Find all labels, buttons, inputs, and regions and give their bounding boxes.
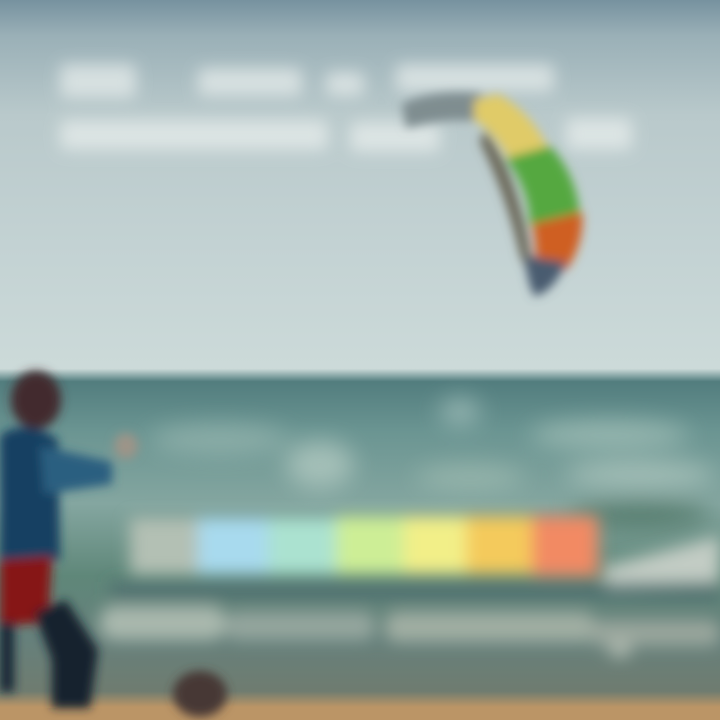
distant figure head [173, 671, 227, 717]
title line 2 [60, 118, 632, 152]
head [11, 371, 61, 429]
leg right [34, 600, 98, 708]
arm [40, 446, 112, 494]
segment: teal [268, 518, 338, 574]
title line 1 [60, 64, 554, 98]
white surf bands [100, 536, 720, 658]
segment: light green [336, 516, 406, 574]
wave texture [150, 399, 715, 529]
title: illegible blurred heading [60, 64, 632, 152]
kite dark underside [480, 130, 536, 290]
icon: kite [402, 92, 582, 296]
kite orange panel [532, 212, 582, 270]
kite green panel [506, 146, 580, 226]
segment: grey [130, 518, 198, 574]
person: kite flyer [0, 371, 138, 708]
leg left [0, 622, 14, 692]
color scale bar [130, 516, 598, 576]
torso [0, 427, 60, 566]
segment: amber [466, 516, 532, 574]
kite dark tip [526, 256, 566, 296]
segment: light blue [198, 518, 270, 574]
segment: coral [532, 516, 598, 576]
kite grey tip [402, 92, 484, 128]
segment: yellow [404, 516, 468, 574]
hand [114, 433, 138, 459]
kite yellow panel [474, 94, 548, 164]
shorts [0, 556, 52, 626]
